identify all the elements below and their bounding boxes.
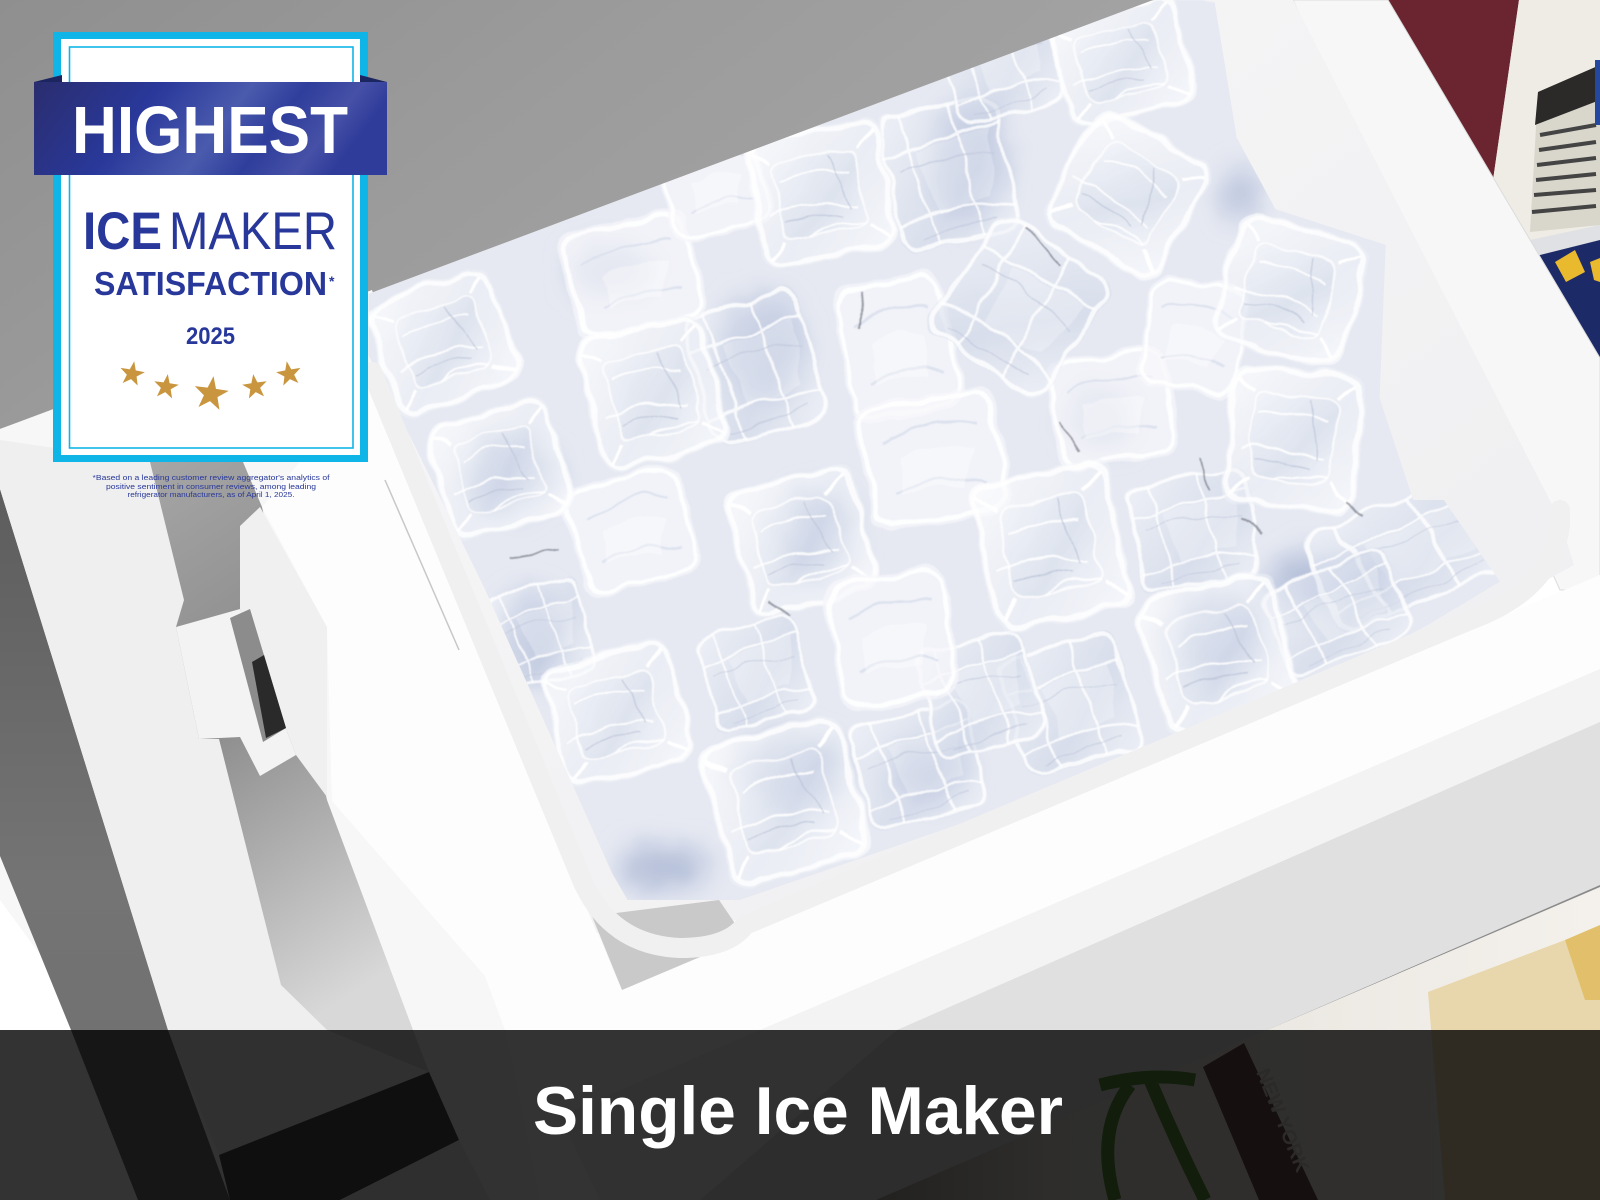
year: 2025	[186, 323, 235, 350]
fridge shelf and food bottom right	[876, 887, 1600, 1200]
footnote	[92, 473, 331, 499]
bin rim	[372, 372, 1560, 948]
ice maker wordmark: MAKER	[169, 202, 337, 261]
five gold stars	[118, 359, 303, 411]
drawer front panel	[262, 380, 1600, 1200]
satisfaction: SATISFACTION	[94, 265, 327, 302]
frame seam line	[385, 480, 459, 650]
title: Single Ice Maker	[533, 1073, 1063, 1149]
white drawer base	[0, 290, 1600, 1200]
gray recess behind drawer	[150, 462, 429, 1072]
green beans	[1100, 1077, 1205, 1200]
ribbon folds	[34, 75, 387, 82]
ribbon	[34, 82, 387, 175]
dark cabinet side strip	[0, 489, 230, 1200]
satisfaction badge	[34, 32, 387, 499]
translucent title band	[0, 1030, 1600, 1200]
book spine lettering: NEW YORK	[1251, 1066, 1313, 1176]
right cabinet frame	[1293, 0, 1600, 590]
ice cubes	[368, 0, 1500, 900]
footnote: positive sentiment in consumer reviews, among leading	[106, 482, 316, 491]
ice maker wordmark: ICE	[83, 202, 162, 261]
heading highest: HIGHEST	[72, 93, 348, 168]
shadow gap under bin	[592, 900, 745, 990]
footnote: *Based on a leading customer review aggregator's analytics of	[92, 473, 331, 482]
badge card	[53, 32, 368, 462]
bin back wall	[368, 0, 1574, 933]
brushed steel door	[0, 0, 1155, 429]
asterisk: *	[329, 273, 335, 289]
left door frame	[0, 440, 429, 1155]
drawer rail mechanism	[176, 507, 327, 797]
fridge food top right	[1380, 0, 1600, 365]
ice mass	[368, 0, 1500, 900]
footnote: refrigerator manufacturers, as of April 1, 2025.	[128, 490, 294, 499]
black bar below drawer	[219, 1072, 459, 1200]
light floor under bar	[340, 1140, 490, 1200]
